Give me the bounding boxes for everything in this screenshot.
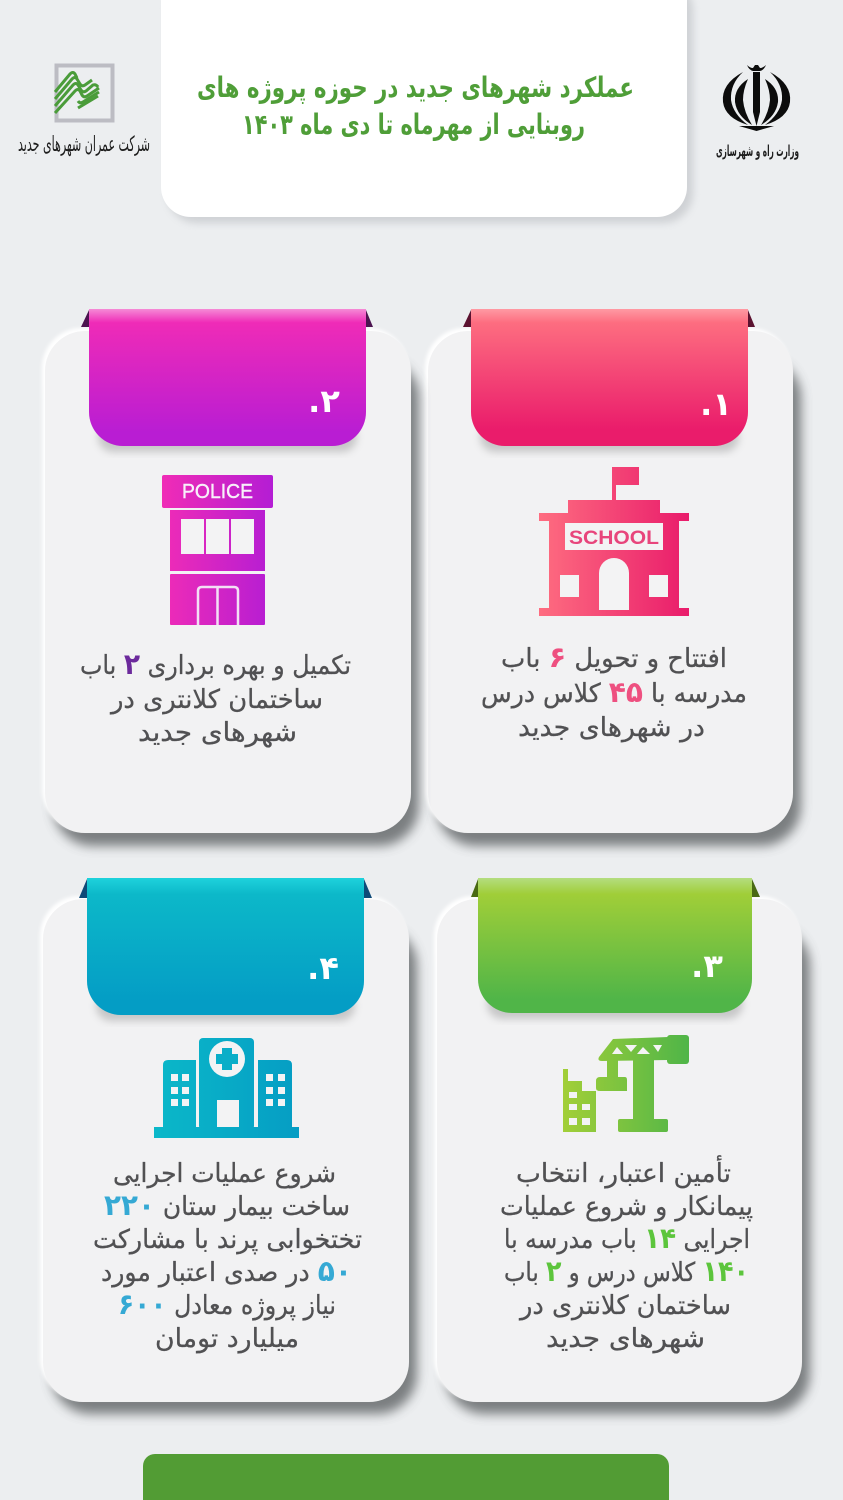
text 4: ساخت بیمار ستان ۲۲۰ [104, 1188, 350, 1222]
icon: police station [162, 475, 273, 625]
text 1: افتتاح و تحویل ۶ باب [501, 640, 727, 674]
panel 4: hospital [40, 878, 417, 1414]
icon: police station: POLICE [182, 481, 253, 503]
text 4: نیاز پروژه معادل ۶۰۰ [118, 1287, 336, 1321]
title: عملکرد شهرهای جدید در حوزه پروژه های [197, 71, 634, 104]
panel 1: school [425, 309, 801, 846]
ribbon 1: ۱. [700, 385, 732, 423]
ribbon 4 [79, 878, 372, 1021]
text 3: ساختمان کلانتری در [518, 1291, 731, 1321]
text 4: شروع عملیات اجرایی [113, 1159, 336, 1189]
text 4: میلیارد تومان [155, 1324, 299, 1354]
text 3: ۱۴۰ کلاس درس و ۲ باب [504, 1254, 749, 1288]
title [197, 71, 634, 141]
icon: crane and building [563, 1035, 689, 1132]
text 3: اجرایی ۱۴ باب مدرسه با [504, 1221, 750, 1255]
header card [161, 0, 693, 223]
ribbon 1 [463, 309, 755, 452]
text 1: مدرسه با ۴۵ کلاس درس [481, 675, 747, 709]
ribbon 3 [471, 878, 760, 1019]
text 2: ساختمان کلانتری در [109, 685, 323, 715]
logo: new cities company [18, 66, 150, 156]
panel 3: construction [434, 878, 810, 1414]
text 1 [481, 640, 747, 743]
text 3: تأمین اعتبار، انتخاب [516, 1154, 731, 1189]
icon: school: SCHOOL [569, 528, 659, 549]
icon: school [539, 467, 689, 616]
panel 2: police [42, 309, 419, 846]
icon: hospital [154, 1038, 299, 1138]
footer green bar [143, 1454, 669, 1500]
text 3: پیمانکار و شروع عملیات [500, 1192, 753, 1222]
text 4: ۵۰ در صدی اعتبار مورد [101, 1254, 352, 1288]
ribbon 2 [81, 309, 373, 452]
text 3: شهرهای جدید [546, 1324, 705, 1354]
text 3 [500, 1154, 753, 1354]
text 4 [93, 1159, 362, 1354]
text 4: تختخوابی پرند با مشارکت [93, 1225, 362, 1255]
text 2 [80, 647, 351, 748]
logo: new cities company: شرکت عمران شهرهای جدید [18, 132, 150, 156]
text 2: تکمیل و بهره برداری ۲ باب [80, 647, 351, 681]
text 2: شهرهای جدید [138, 718, 297, 748]
logo: ministry emblem [716, 65, 799, 160]
ribbon 2: ۲. [308, 382, 340, 420]
ribbon 4: ۴. [307, 949, 339, 987]
text 1: در شهرهای جدید [518, 713, 705, 743]
title: روبنایی از مهرماه تا دی ماه ۱۴۰۳ [242, 108, 585, 141]
ribbon 3: ۳. [691, 947, 723, 985]
